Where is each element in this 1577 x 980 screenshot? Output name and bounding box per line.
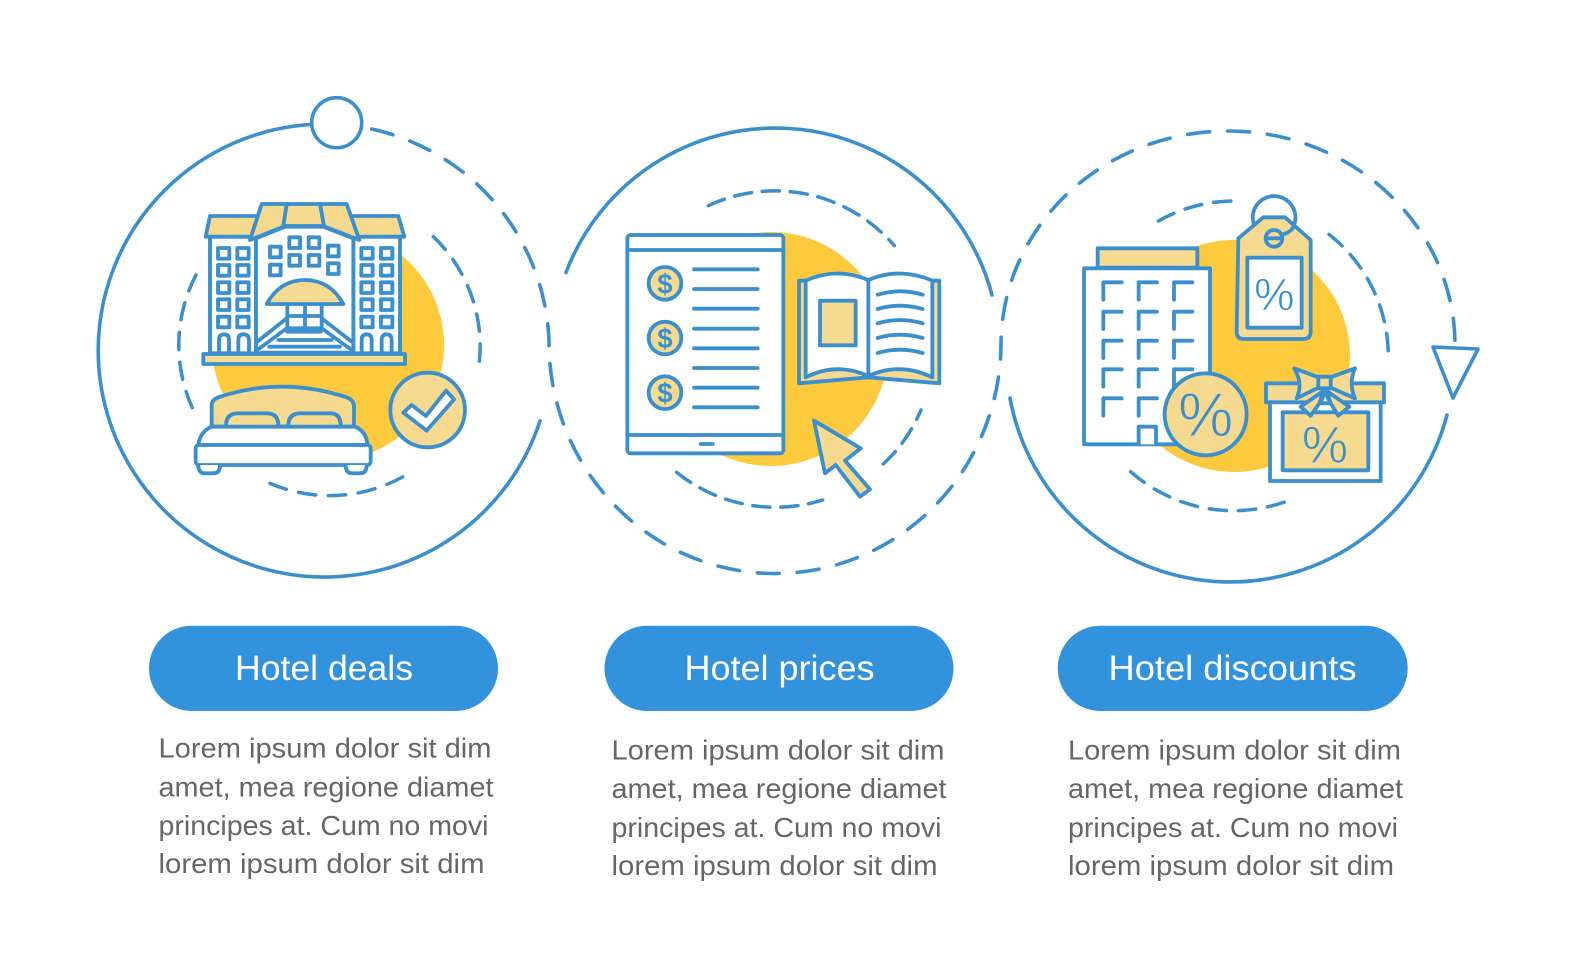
text block: discounts description: amet, mea regione diamet bbox=[1068, 773, 1403, 804]
yellow disc 3 bbox=[1118, 240, 1350, 472]
connecting timeline: circles and arrow bbox=[98, 98, 1478, 582]
text block: deals description: Lorem ipsum dolor sit dim bbox=[158, 732, 491, 764]
pill: hotel prices bbox=[604, 626, 954, 711]
solid arc: circle 2 bbox=[566, 128, 992, 295]
pill: hotel discounts: Hotel discounts bbox=[1108, 649, 1356, 688]
column: hotel discounts text bbox=[1058, 626, 1408, 881]
text block: discounts description: lorem ipsum dolor sit dim bbox=[1068, 850, 1394, 881]
icon: office building bbox=[1084, 248, 1210, 444]
pill: hotel deals: Hotel deals bbox=[235, 649, 413, 688]
pill: hotel prices: Hotel prices bbox=[684, 649, 874, 688]
icon: check badge bbox=[390, 373, 465, 447]
icon: percent badge: % bbox=[1178, 381, 1233, 450]
text block: prices description: amet, mea regione diamet bbox=[612, 773, 947, 804]
icon: price tag: % bbox=[1254, 269, 1294, 320]
text block: discounts description: Lorem ipsum dolor sit dim bbox=[1068, 734, 1401, 766]
panel: hotel discounts illustration bbox=[1084, 196, 1388, 511]
icon: dollar coins: $ bbox=[657, 268, 673, 299]
column: hotel prices text bbox=[604, 626, 954, 881]
solid arc: circle 3 bbox=[1010, 398, 1447, 582]
icon: dollar coins bbox=[649, 267, 681, 409]
text block: deals description: principes at. Cum no movi bbox=[158, 810, 488, 841]
text block: prices description: lorem ipsum dolor sit dim bbox=[612, 850, 938, 881]
icon: tablet price list bbox=[627, 235, 939, 497]
icon: gift box bbox=[1266, 368, 1384, 481]
column: hotel deals text bbox=[149, 626, 498, 879]
panel: hotel prices illustration bbox=[627, 191, 939, 507]
icon: hotel building bbox=[196, 204, 465, 473]
icon: price tag bbox=[1237, 196, 1311, 339]
text block: prices description: principes at. Cum no movi bbox=[612, 812, 942, 843]
panel: hotel deals illustration bbox=[179, 204, 480, 496]
icon: gift box: % bbox=[1302, 416, 1348, 474]
arrow head triangle bbox=[1433, 347, 1478, 398]
yellow disc 1 bbox=[212, 229, 444, 461]
inner dashed arcs 3 bbox=[1131, 201, 1388, 511]
text block: discounts description bbox=[1068, 734, 1403, 881]
text block: prices description bbox=[612, 734, 947, 881]
icon: bed bbox=[196, 387, 371, 473]
yellow disc 2 bbox=[654, 232, 888, 466]
inner dashed arcs 2 bbox=[677, 191, 921, 507]
pill: hotel deals bbox=[149, 626, 498, 711]
icon: open book bbox=[799, 273, 939, 383]
text block: discounts description: principes at. Cum no movi bbox=[1068, 812, 1398, 843]
icon: percent badge bbox=[1165, 373, 1247, 455]
text block: deals description: amet, mea regione diamet bbox=[158, 772, 494, 802]
icon: dollar coins: $ bbox=[657, 323, 673, 354]
dashed S-curve through all circles bbox=[372, 129, 1455, 574]
inner dashed arcs 1 bbox=[179, 237, 480, 496]
start marker circle bbox=[312, 98, 362, 148]
text block: deals description: lorem ipsum dolor sit dim bbox=[158, 848, 484, 879]
text block: deals description bbox=[158, 732, 494, 879]
pill: hotel discounts bbox=[1058, 626, 1408, 711]
icon: cursor arrow bbox=[814, 421, 870, 497]
solid arc: circle 1 bbox=[98, 124, 540, 577]
icon: dollar coins: $ bbox=[657, 378, 673, 409]
text block: prices description: Lorem ipsum dolor sit dim bbox=[612, 734, 944, 766]
